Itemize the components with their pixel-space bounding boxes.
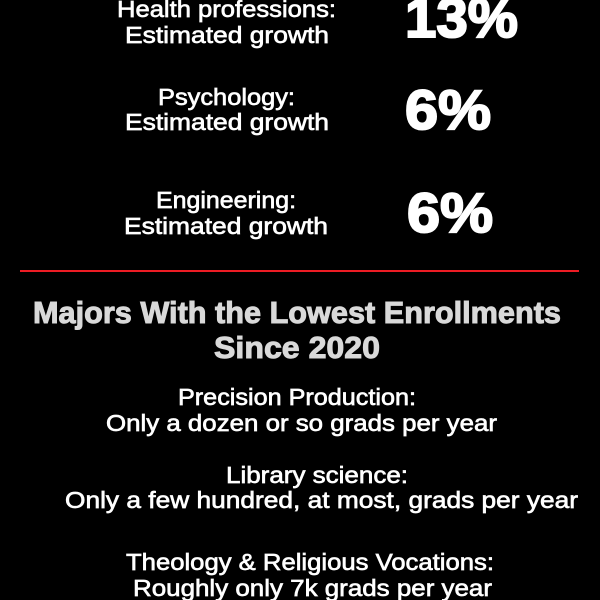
- text block: library science: Only a few hundred, at most, grads per year: [65, 487, 578, 513]
- label: psychology: Psychology:: [158, 84, 295, 110]
- label: engineering: Estimated growth: [124, 213, 328, 239]
- text block: library science: [65, 462, 578, 513]
- heading: lowest enrollments: Majors With the Lowest Enrollments: [33, 295, 561, 330]
- heading: lowest enrollments: Since 2020: [214, 330, 380, 365]
- label: engineering: [124, 187, 328, 239]
- stat: 6%: 6%: [405, 78, 491, 141]
- text block: theology and religious vocations: [126, 549, 494, 600]
- stat: 6%: 6%: [407, 181, 493, 244]
- growth row: engineering: [124, 181, 493, 244]
- red divider: [20, 270, 579, 272]
- heading: lowest enrollments: [33, 295, 561, 365]
- text block: library science: Library science:: [226, 462, 408, 488]
- growth row: health professions: [117, 0, 518, 49]
- text block: precision production: Precision Production:: [178, 384, 416, 410]
- label: health professions: Estimated growth: [125, 22, 329, 48]
- label: engineering: Engineering:: [156, 187, 296, 213]
- text block: precision production: Only a dozen or so grads per year: [106, 410, 497, 436]
- growth row: psychology: [125, 78, 491, 141]
- label: psychology: Estimated growth: [125, 109, 329, 135]
- text block: theology and religious vocations: Theology & Religious Vocations:: [126, 549, 494, 575]
- text block: precision production: [106, 384, 497, 436]
- label: health professions: [117, 0, 336, 48]
- label: psychology: [125, 84, 329, 135]
